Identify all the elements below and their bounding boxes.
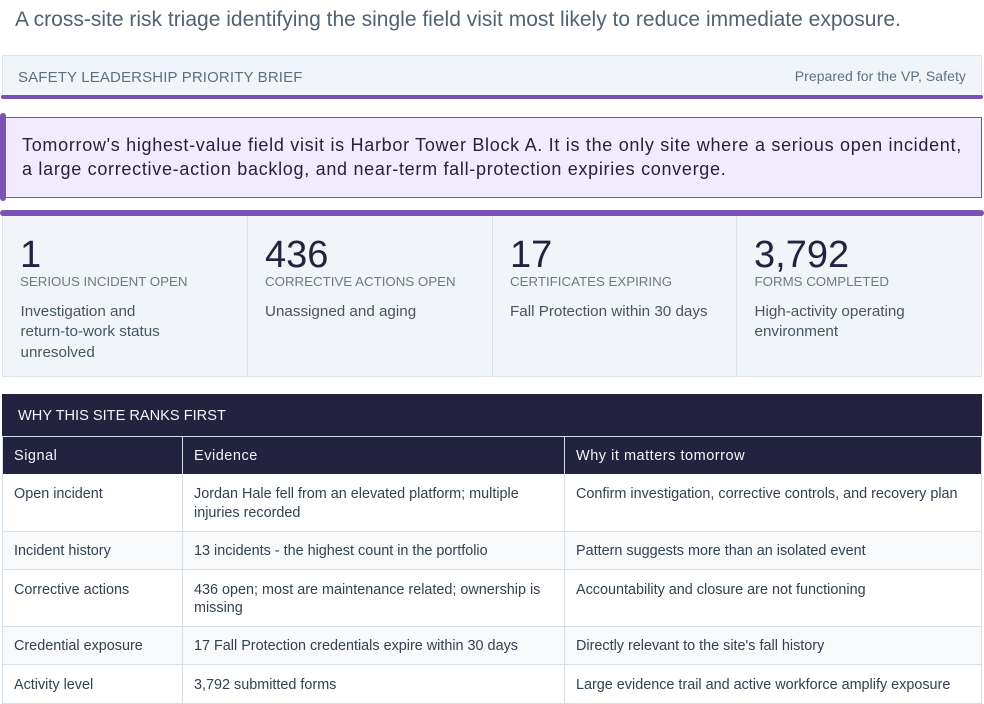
cell text: Large evidence trail and active workforce amplify exposure — [576, 677, 950, 693]
description — [20, 302, 160, 360]
header: why it matters: Why it matters tomorrow — [576, 448, 745, 464]
label: CORRECTIVE ACTIONS OPEN — [265, 274, 456, 289]
description: environment — [754, 323, 838, 340]
callout text: Tomorrow's highest-value field visit is Harbor Tower Block A. It is the only site where a serious open incident, — [22, 135, 962, 155]
label: CERTIFICATES EXPIRING — [510, 274, 672, 289]
cell text: 13 incidents - the highest count in the portfolio — [194, 543, 488, 559]
row: incident history — [2, 532, 982, 570]
cell text: Activity level — [14, 677, 93, 693]
row: corrective actions — [2, 570, 982, 627]
cell text — [194, 582, 540, 616]
row: open incident — [2, 474, 982, 532]
description: unresolved — [20, 344, 95, 360]
cell text: injuries recorded — [194, 504, 300, 520]
purple rule under header — [1, 95, 983, 99]
cell text: Open incident — [14, 486, 103, 502]
cell text: 17 Fall Protection credentials expire within 30 days — [194, 638, 518, 654]
table title bar: WHY THIS SITE RANKS FIRST — [18, 408, 226, 424]
value: 1 — [20, 234, 41, 276]
metric: serious incident — [2, 216, 248, 377]
table header row — [2, 436, 982, 474]
label: FORMS COMPLETED — [754, 274, 889, 289]
brief header bar — [2, 55, 982, 97]
callout text — [22, 135, 962, 179]
subtitle: A cross-site risk triage identifying the single field visit most likely to reduce immediate exposure. — [15, 8, 901, 31]
cell text: Jordan Hale fell from an elevated platform; multiple — [194, 486, 519, 502]
cell text — [194, 486, 519, 520]
cell text: missing — [194, 600, 243, 616]
description: return-to-work status — [20, 323, 160, 340]
brief title: SAFETY LEADERSHIP PRIORITY BRIEF — [18, 69, 303, 86]
label: SERIOUS INCIDENT OPEN — [20, 274, 187, 289]
cell text: Accountability and closure are not functioning — [576, 582, 866, 598]
description: Unassigned and aging — [265, 302, 416, 320]
description — [754, 302, 905, 340]
callout text: a large corrective-action backlog, and near-term fall-protection expiries converge. — [22, 159, 726, 179]
value: 3,792 — [754, 234, 849, 276]
row: credential exposure — [2, 627, 982, 665]
table title bar — [2, 394, 982, 436]
metric cards — [2, 216, 982, 377]
row: activity level — [2, 665, 982, 704]
description: Fall Protection within 30 days — [510, 302, 708, 320]
prepared for note: Prepared for the VP, Safety — [795, 68, 966, 84]
callout box — [2, 117, 982, 198]
description: Investigation and — [20, 302, 135, 320]
description: High-activity operating — [754, 302, 905, 320]
callout accent bar — [0, 113, 6, 201]
value: 17 — [510, 234, 552, 276]
purple rule above metrics — [0, 210, 984, 216]
cell text: 3,792 submitted forms — [194, 677, 336, 693]
metric: certificates — [493, 216, 737, 377]
cell text: Directly relevant to the site's fall history — [576, 638, 824, 654]
metric: corrective actions — [248, 216, 493, 377]
header: evidence: Evidence — [194, 448, 258, 464]
callout: key recommendation — [0, 113, 982, 201]
cell text: Confirm investigation, corrective controls, and recovery plan — [576, 486, 958, 502]
cell text: 436 open; most are maintenance related; ownership is — [194, 582, 540, 598]
cell text: Credential exposure — [14, 638, 143, 654]
cell text: Pattern suggests more than an isolated event — [576, 543, 866, 559]
header: signal: Signal — [14, 448, 57, 464]
value: 436 — [265, 234, 328, 276]
cell text: Incident history — [14, 543, 111, 559]
cell text: Corrective actions — [14, 582, 129, 598]
metric: forms — [737, 216, 982, 377]
